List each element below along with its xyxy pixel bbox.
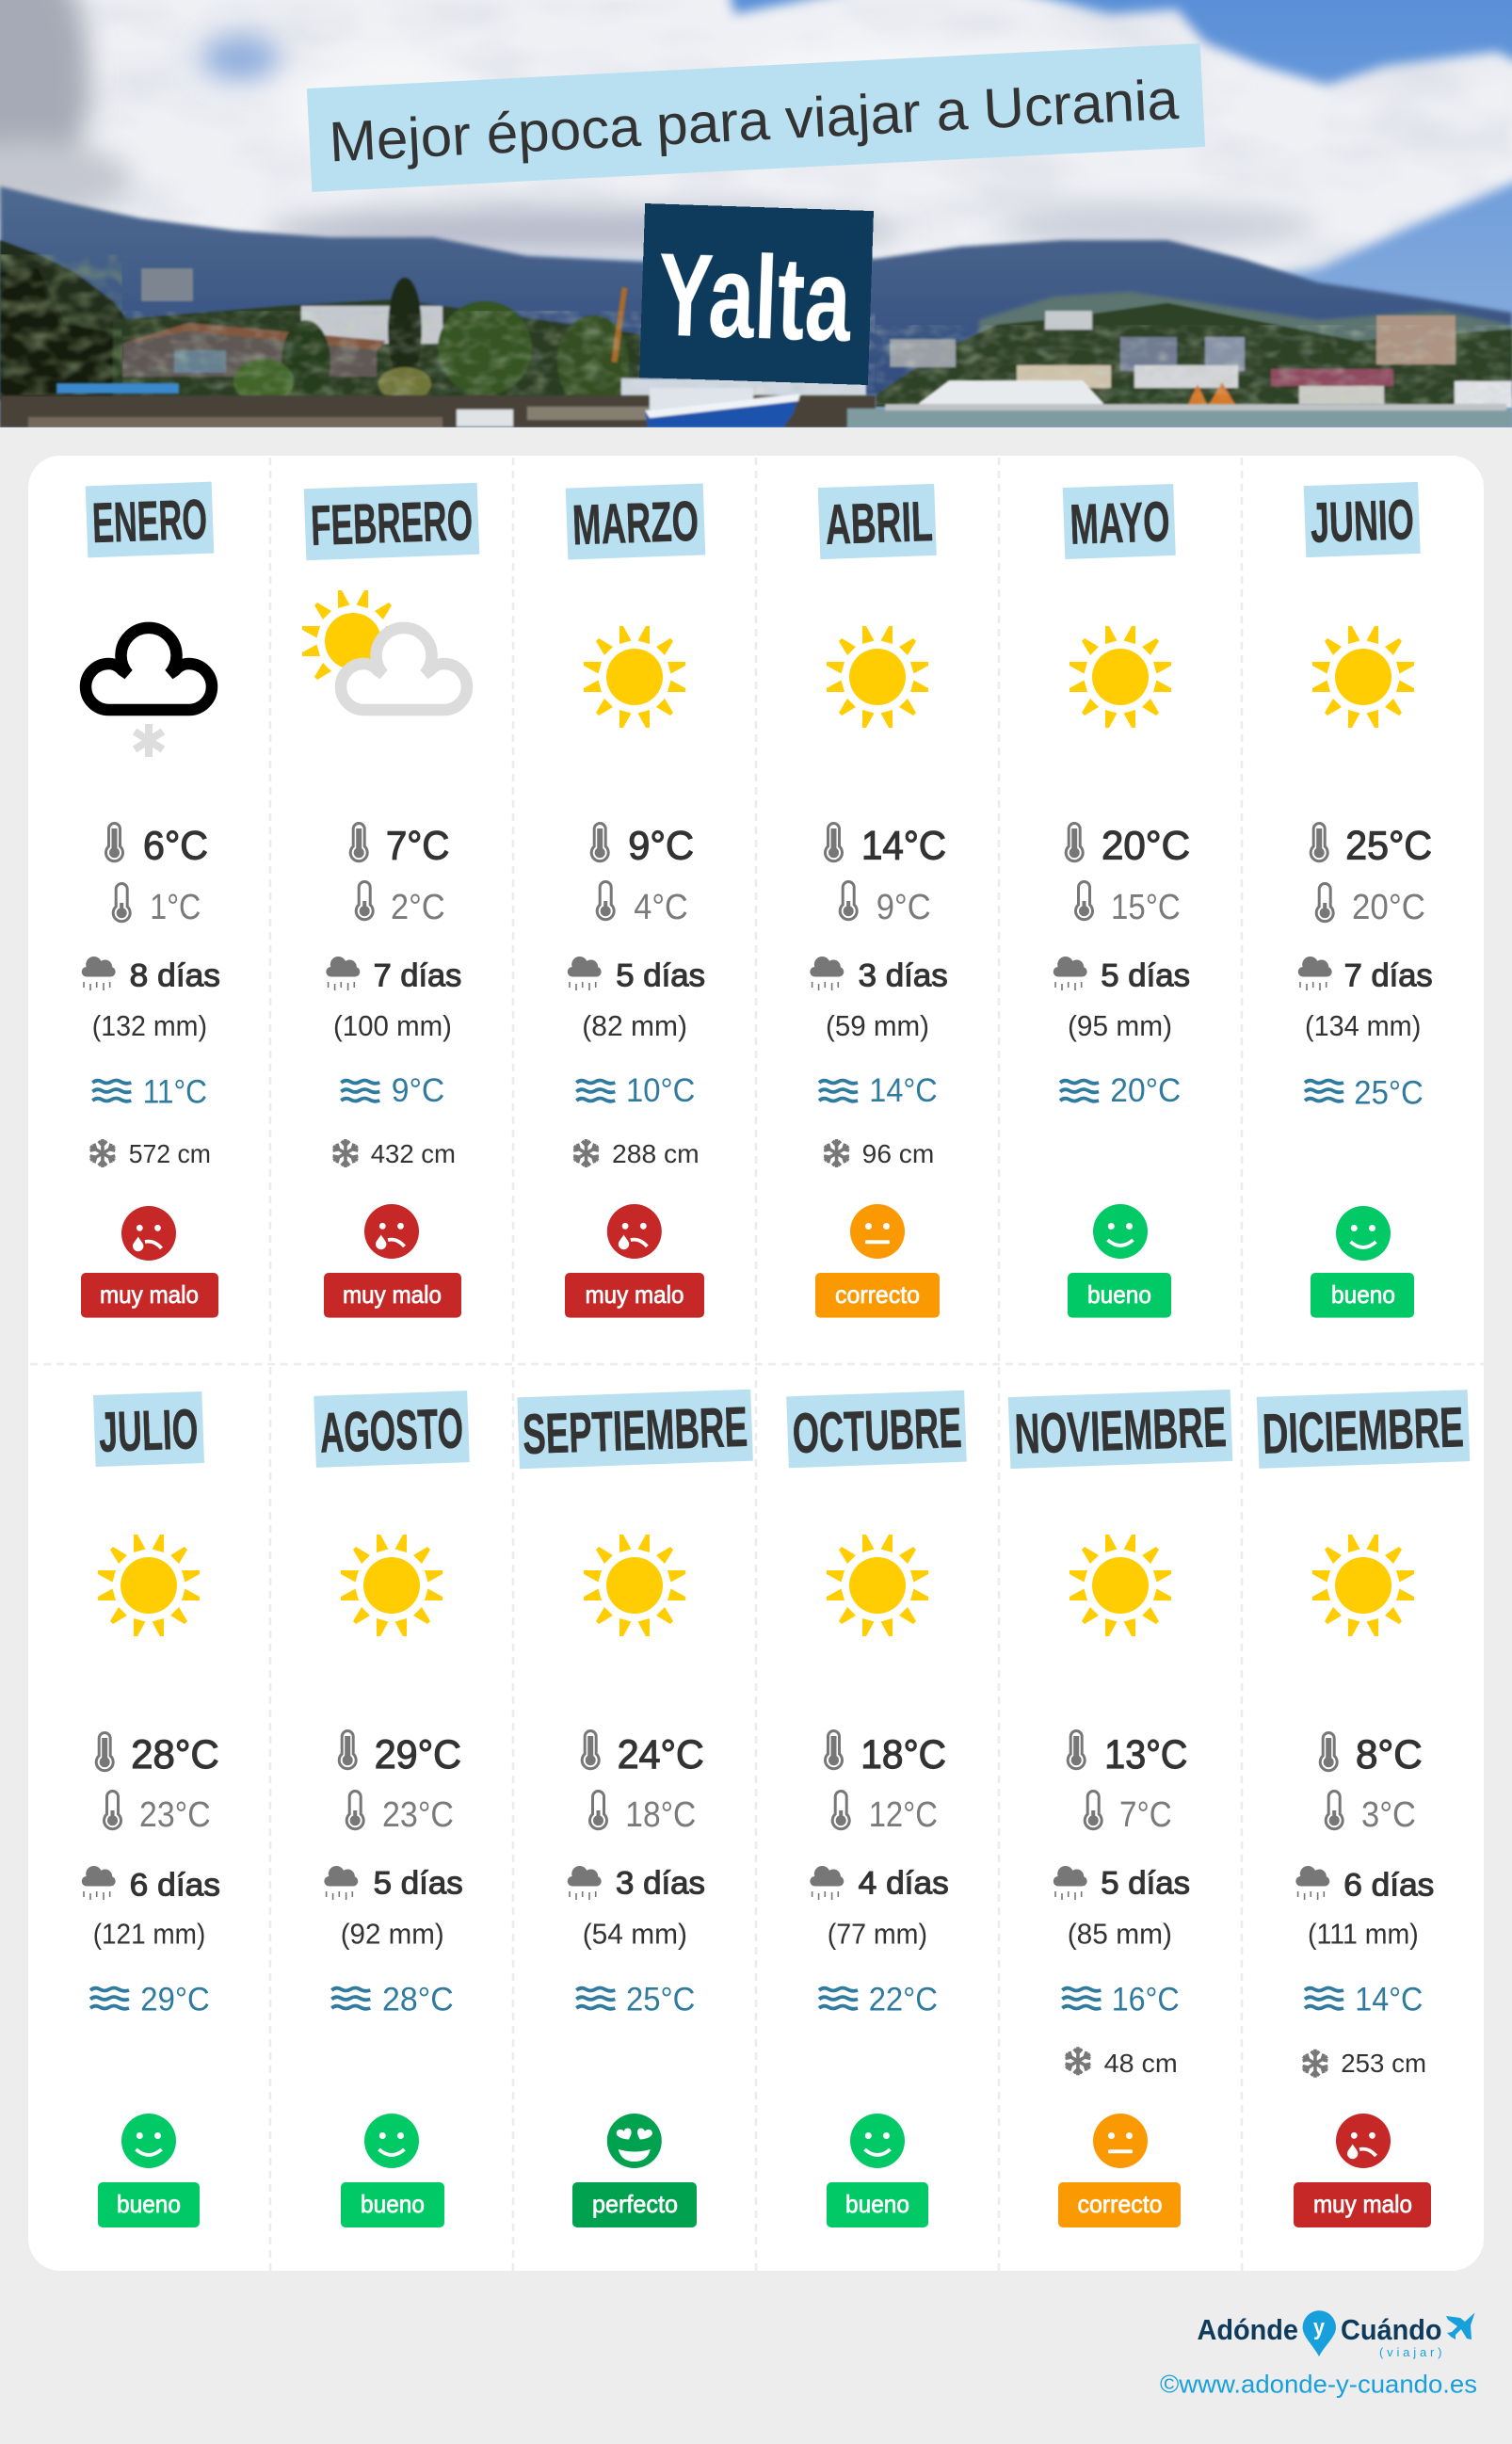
low temperature <box>1316 883 1425 927</box>
heading: julio: JULIO <box>98 1397 200 1464</box>
sea temperature: 10°C <box>626 1072 695 1109</box>
rating badge <box>1311 1273 1414 1318</box>
low temperature <box>840 881 931 927</box>
month: noviembre <box>1008 1390 1232 2227</box>
heading: febrero <box>304 483 479 560</box>
rainy days <box>568 957 705 994</box>
low temperature <box>589 1791 696 1835</box>
rating badge <box>572 2182 697 2227</box>
title banner: Mejor época para viajar a Ucrania <box>328 68 1181 173</box>
heading: marzo: MARZO <box>571 490 700 556</box>
rating badge <box>565 1273 704 1318</box>
rating badge <box>324 1273 461 1318</box>
website credit: ©www.adonde-y-cuando.es <box>1160 2371 1477 2399</box>
icon: sun <box>584 1535 685 1636</box>
month: enero <box>81 482 220 1318</box>
high temperature <box>1068 1730 1187 1777</box>
sea temperature <box>331 1982 454 2018</box>
sea temperature <box>1305 1982 1423 2018</box>
rating badge: perfecto <box>592 2190 678 2218</box>
main white panel <box>28 456 1484 2271</box>
rating badge: muy malo <box>1313 2190 1412 2218</box>
heading: noviembre: NOVIEMBRE <box>1014 1395 1228 1466</box>
high temperature <box>1320 1732 1423 1777</box>
sea temperature: 22°C <box>869 1982 938 2018</box>
sea temperature: 14°C <box>869 1072 938 1109</box>
snow depth <box>1064 2047 1178 2078</box>
rainy days <box>326 957 461 994</box>
rainy days: 5 días <box>1101 958 1190 994</box>
rainy days: 5 días <box>1101 1866 1190 1902</box>
rainfall: (100 mm) <box>333 1009 452 1042</box>
month: diciembre <box>1257 1390 1470 2227</box>
high temperature: 18°C <box>861 1732 946 1777</box>
title banner <box>307 43 1205 192</box>
city name box: Yalta <box>639 203 874 385</box>
rainfall: (134 mm) <box>1305 1009 1421 1042</box>
low temperature <box>1326 1791 1416 1835</box>
high temperature <box>339 1730 461 1777</box>
rainy days: 8 días <box>130 958 220 994</box>
icon: sun <box>1070 626 1171 728</box>
rating badge: correcto <box>1077 2190 1162 2218</box>
rainy days: 7 días <box>374 958 461 994</box>
sea temperature: 25°C <box>626 1982 695 2018</box>
icon: sun <box>584 626 685 728</box>
snow depth: 288 cm <box>612 1139 700 1168</box>
icon: sun behind grey cloud <box>302 590 467 710</box>
rating badge: correcto <box>835 1280 920 1309</box>
rainfall: (59 mm) <box>826 1009 929 1042</box>
heading: junio <box>1304 482 1421 557</box>
rainy days: 4 días <box>859 1866 949 1902</box>
snow depth: 96 cm <box>862 1139 934 1168</box>
rainfall: (77 mm) <box>828 1917 927 1950</box>
snow depth <box>331 1139 456 1168</box>
heading: abril <box>818 484 937 559</box>
icon: black cloud with snow <box>86 628 212 757</box>
low temperature: 3°C <box>1361 1795 1416 1835</box>
rating badge <box>98 2182 200 2227</box>
sea temperature: 28°C <box>382 1982 454 2018</box>
face: acceptable <box>1093 2114 1148 2168</box>
sea temperature <box>576 1072 695 1109</box>
high temperature <box>825 823 946 868</box>
rating badge <box>1058 2182 1181 2227</box>
rainfall: (92 mm) <box>341 1917 444 1950</box>
month: abril <box>810 484 948 1318</box>
high temperature: 7°C <box>386 823 449 868</box>
rainy days <box>82 957 220 994</box>
month: junio <box>1298 482 1433 1318</box>
face: very bad <box>364 1204 419 1259</box>
rating badge: muy malo <box>343 1280 442 1309</box>
low temperature: 2°C <box>391 888 445 927</box>
logo: Adónde y Cuándo: Adónde <box>1198 2313 1298 2346</box>
rainy days: 7 días <box>1344 958 1433 994</box>
low temperature: 15°C <box>1111 888 1181 927</box>
rainy days: 6 días <box>1343 1868 1434 1904</box>
heading: febrero: FEBRERO <box>310 489 474 557</box>
rainy days: 3 días <box>616 1866 705 1902</box>
face: very bad <box>121 1206 176 1261</box>
sea temperature <box>819 1982 938 2018</box>
icon: sun <box>1312 1535 1414 1636</box>
heading: octubre: OCTUBRE <box>792 1396 963 1465</box>
high temperature <box>582 1730 704 1777</box>
rainfall: (95 mm) <box>1068 1009 1172 1042</box>
face: good <box>1093 1204 1148 1259</box>
sea temperature <box>819 1072 938 1109</box>
rating badge <box>827 2182 928 2227</box>
face: perfect <box>607 2114 662 2168</box>
month: julio <box>82 1391 220 2227</box>
icon: sun <box>98 1535 200 1636</box>
face: good <box>121 2114 176 2168</box>
logo: Adónde y Cuándo: (viajar) <box>1379 2345 1442 2359</box>
sea temperature <box>90 1982 210 2018</box>
icon: sun <box>341 1535 442 1636</box>
sea temperature: 29°C <box>140 1982 210 2018</box>
high temperature: 13°C <box>1104 1732 1187 1777</box>
low temperature: 7°C <box>1119 1795 1172 1835</box>
rainy days: 3 días <box>859 958 948 994</box>
logo: Adónde y Cuándo: Cuándo <box>1341 2313 1442 2346</box>
low temperature: 1°C <box>150 888 201 927</box>
rainfall: (82 mm) <box>582 1009 687 1042</box>
snow depth: 572 cm <box>129 1139 211 1168</box>
rating badge <box>81 1273 218 1318</box>
high temperature <box>1311 823 1432 868</box>
sea temperature: 14°C <box>1355 1982 1423 2018</box>
high temperature: 29°C <box>375 1732 461 1777</box>
rainfall: (54 mm) <box>583 1917 687 1950</box>
snow depth <box>88 1139 211 1168</box>
high temperature <box>105 823 208 868</box>
high temperature: 25°C <box>1345 823 1432 868</box>
rating badge <box>815 1273 940 1318</box>
city name box: Yalta: Yalta <box>656 230 854 366</box>
rating badge <box>341 2182 444 2227</box>
month: mayo <box>1054 484 1190 1318</box>
sea temperature: 16°C <box>1112 1982 1180 2018</box>
icon: plane <box>1446 2312 1474 2339</box>
rainy days <box>810 957 948 994</box>
rainy days <box>82 1866 220 1904</box>
high temperature <box>350 823 449 868</box>
face: good <box>364 2114 419 2168</box>
low temperature <box>113 883 201 927</box>
heading: septiembre <box>517 1390 753 1469</box>
header photo: Yalta harbour and mountains <box>0 0 1512 427</box>
rainfall: (111 mm) <box>1308 1917 1419 1950</box>
rainy days <box>1295 1866 1434 1904</box>
sea temperature: 9°C <box>392 1072 444 1109</box>
heading: agosto <box>314 1391 470 1468</box>
rainy days <box>324 1866 463 1902</box>
month: agosto <box>314 1391 470 2227</box>
high temperature: 24°C <box>618 1732 704 1777</box>
sea temperature <box>1305 1075 1424 1111</box>
icon: map pin with y <box>1303 2310 1336 2356</box>
rating badge: bueno <box>361 2190 425 2218</box>
month: octubre <box>786 1391 967 2227</box>
rainy days: 5 días <box>616 958 705 994</box>
icon: sun <box>827 1535 928 1636</box>
rating badge: bueno <box>1331 1280 1395 1309</box>
high temperature: 9°C <box>628 823 694 868</box>
low temperature: 23°C <box>139 1795 211 1835</box>
icon: sun <box>1070 1535 1171 1636</box>
snow depth: 253 cm <box>1341 2049 1426 2078</box>
high temperature: 28°C <box>131 1732 219 1777</box>
heading: enero <box>86 482 214 557</box>
rainy days: 5 días <box>374 1866 463 1902</box>
rating badge: bueno <box>845 2190 909 2218</box>
sea temperature <box>1060 1072 1181 1109</box>
rainy days <box>810 1866 949 1902</box>
high temperature <box>591 823 694 868</box>
high temperature <box>825 1730 946 1777</box>
snow depth <box>822 1139 934 1168</box>
rating badge: muy malo <box>586 1280 684 1309</box>
low temperature <box>1075 881 1181 927</box>
high temperature: 20°C <box>1102 823 1190 868</box>
icon: sun <box>827 626 928 728</box>
low temperature: 12°C <box>869 1795 938 1835</box>
rainy days <box>1054 1866 1190 1902</box>
snow depth: 432 cm <box>371 1139 456 1168</box>
sea temperature: 25°C <box>1354 1075 1424 1111</box>
rating badge: bueno <box>117 2190 181 2218</box>
logo: Adónde y Cuándo <box>1198 2310 1474 2359</box>
sea temperature <box>1062 1982 1180 2018</box>
sea temperature: 11°C <box>143 1073 207 1110</box>
high temperature: 8°C <box>1356 1732 1423 1777</box>
sea temperature <box>92 1073 207 1110</box>
face: good <box>1336 1206 1391 1261</box>
low temperature <box>1085 1791 1172 1835</box>
rainfall: (85 mm) <box>1068 1917 1172 1950</box>
face: very bad <box>1336 2114 1391 2168</box>
low temperature <box>597 881 688 927</box>
low temperature <box>346 1791 454 1835</box>
heading: enero: ENERO <box>91 488 208 555</box>
snow depth <box>1301 2049 1426 2078</box>
rainy days <box>568 1866 705 1902</box>
rainfall: (132 mm) <box>92 1009 207 1042</box>
sea temperature: 20°C <box>1110 1072 1181 1109</box>
heading: abril: ABRIL <box>825 490 934 556</box>
rating badge <box>1294 2182 1431 2227</box>
face: very bad <box>607 1204 662 1259</box>
heading: julio <box>93 1391 204 1467</box>
high temperature: 6°C <box>143 823 208 868</box>
snow depth: 48 cm <box>1104 2049 1178 2078</box>
month: febrero <box>302 483 479 1318</box>
icon: sun <box>1312 626 1414 728</box>
rating badge: bueno <box>1087 1280 1151 1309</box>
heading: marzo <box>566 483 705 560</box>
heading: octubre <box>786 1391 967 1468</box>
low temperature: 20°C <box>1352 888 1425 927</box>
face: acceptable <box>850 1204 905 1259</box>
heading: mayo: MAYO <box>1069 490 1171 556</box>
icon: map pin with y: y <box>1313 2315 1326 2340</box>
snow depth <box>571 1139 700 1168</box>
rainy days <box>1298 957 1433 994</box>
heading: agosto: AGOSTO <box>319 1396 464 1465</box>
low temperature <box>104 1791 211 1835</box>
low temperature: 23°C <box>382 1795 454 1835</box>
low temperature: 9°C <box>877 888 931 927</box>
low temperature: 18°C <box>625 1795 696 1835</box>
heading: junio: JUNIO <box>1310 488 1415 555</box>
rainfall: (121 mm) <box>93 1917 205 1950</box>
rating badge <box>1068 1273 1171 1318</box>
month: septiembre <box>517 1390 753 2227</box>
low temperature: 4°C <box>634 888 688 927</box>
sea temperature <box>341 1072 444 1109</box>
heading: mayo <box>1063 484 1176 559</box>
low temperature <box>832 1791 938 1835</box>
heading: noviembre <box>1008 1390 1232 1469</box>
sea temperature <box>576 1982 695 2018</box>
low temperature <box>356 881 445 927</box>
rating badge: muy malo <box>100 1280 199 1309</box>
rainy days <box>1054 957 1190 994</box>
high temperature: 14°C <box>861 823 946 868</box>
rainy days: 6 días <box>130 1868 220 1904</box>
face: good <box>850 2114 905 2168</box>
month: marzo <box>565 483 705 1318</box>
heading: septiembre: SEPTIEMBRE <box>522 1395 748 1466</box>
